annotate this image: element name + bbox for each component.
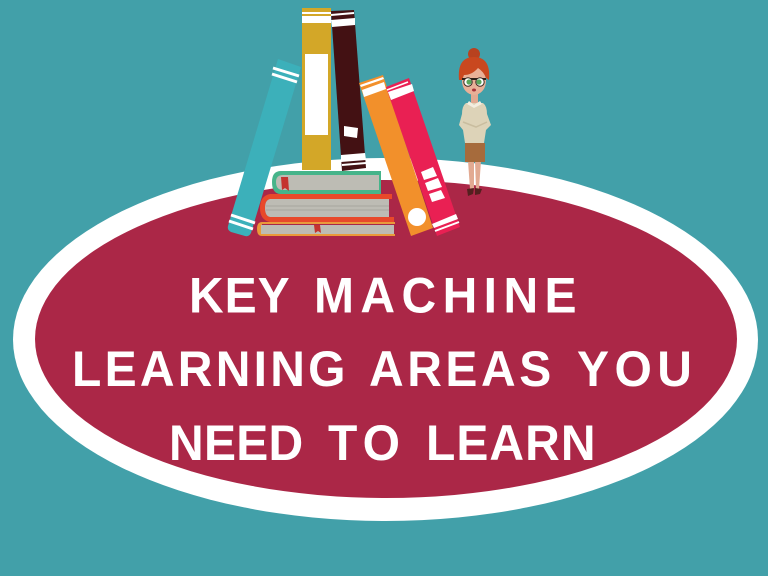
red middle book bbox=[260, 194, 394, 222]
hair bbox=[459, 57, 489, 80]
shoes bbox=[467, 188, 482, 196]
title: KEY bbox=[189, 269, 291, 324]
blue leaning book bbox=[228, 59, 301, 236]
pink leaning book bbox=[386, 78, 460, 236]
icon: woman with glasses bbox=[459, 48, 491, 196]
collar bbox=[467, 101, 482, 108]
glasses bbox=[462, 78, 486, 86]
title: MACHINE bbox=[314, 269, 583, 324]
title: YOU bbox=[577, 342, 697, 397]
orange bottom book bbox=[257, 222, 395, 236]
white oval bbox=[13, 158, 758, 521]
title bbox=[72, 269, 697, 471]
dark brown book bbox=[331, 10, 366, 171]
hair bun bbox=[468, 48, 480, 60]
title: LEARN bbox=[426, 416, 597, 471]
green top book bbox=[272, 171, 381, 194]
orange leaning book bbox=[359, 75, 433, 236]
crimson oval bbox=[35, 180, 737, 498]
blouse bbox=[459, 103, 491, 143]
yellow upright book bbox=[302, 8, 331, 170]
mouth bbox=[472, 88, 476, 92]
head bbox=[462, 67, 486, 95]
title: LEARNING bbox=[72, 342, 349, 397]
title: NEED bbox=[169, 416, 303, 471]
crossed arms bbox=[463, 122, 487, 127]
legs bbox=[468, 161, 481, 189]
title: AREAS bbox=[369, 342, 555, 397]
skirt bbox=[465, 143, 485, 162]
title: TO bbox=[328, 416, 405, 471]
icon: book stack bbox=[228, 8, 460, 236]
neck bbox=[471, 90, 478, 104]
